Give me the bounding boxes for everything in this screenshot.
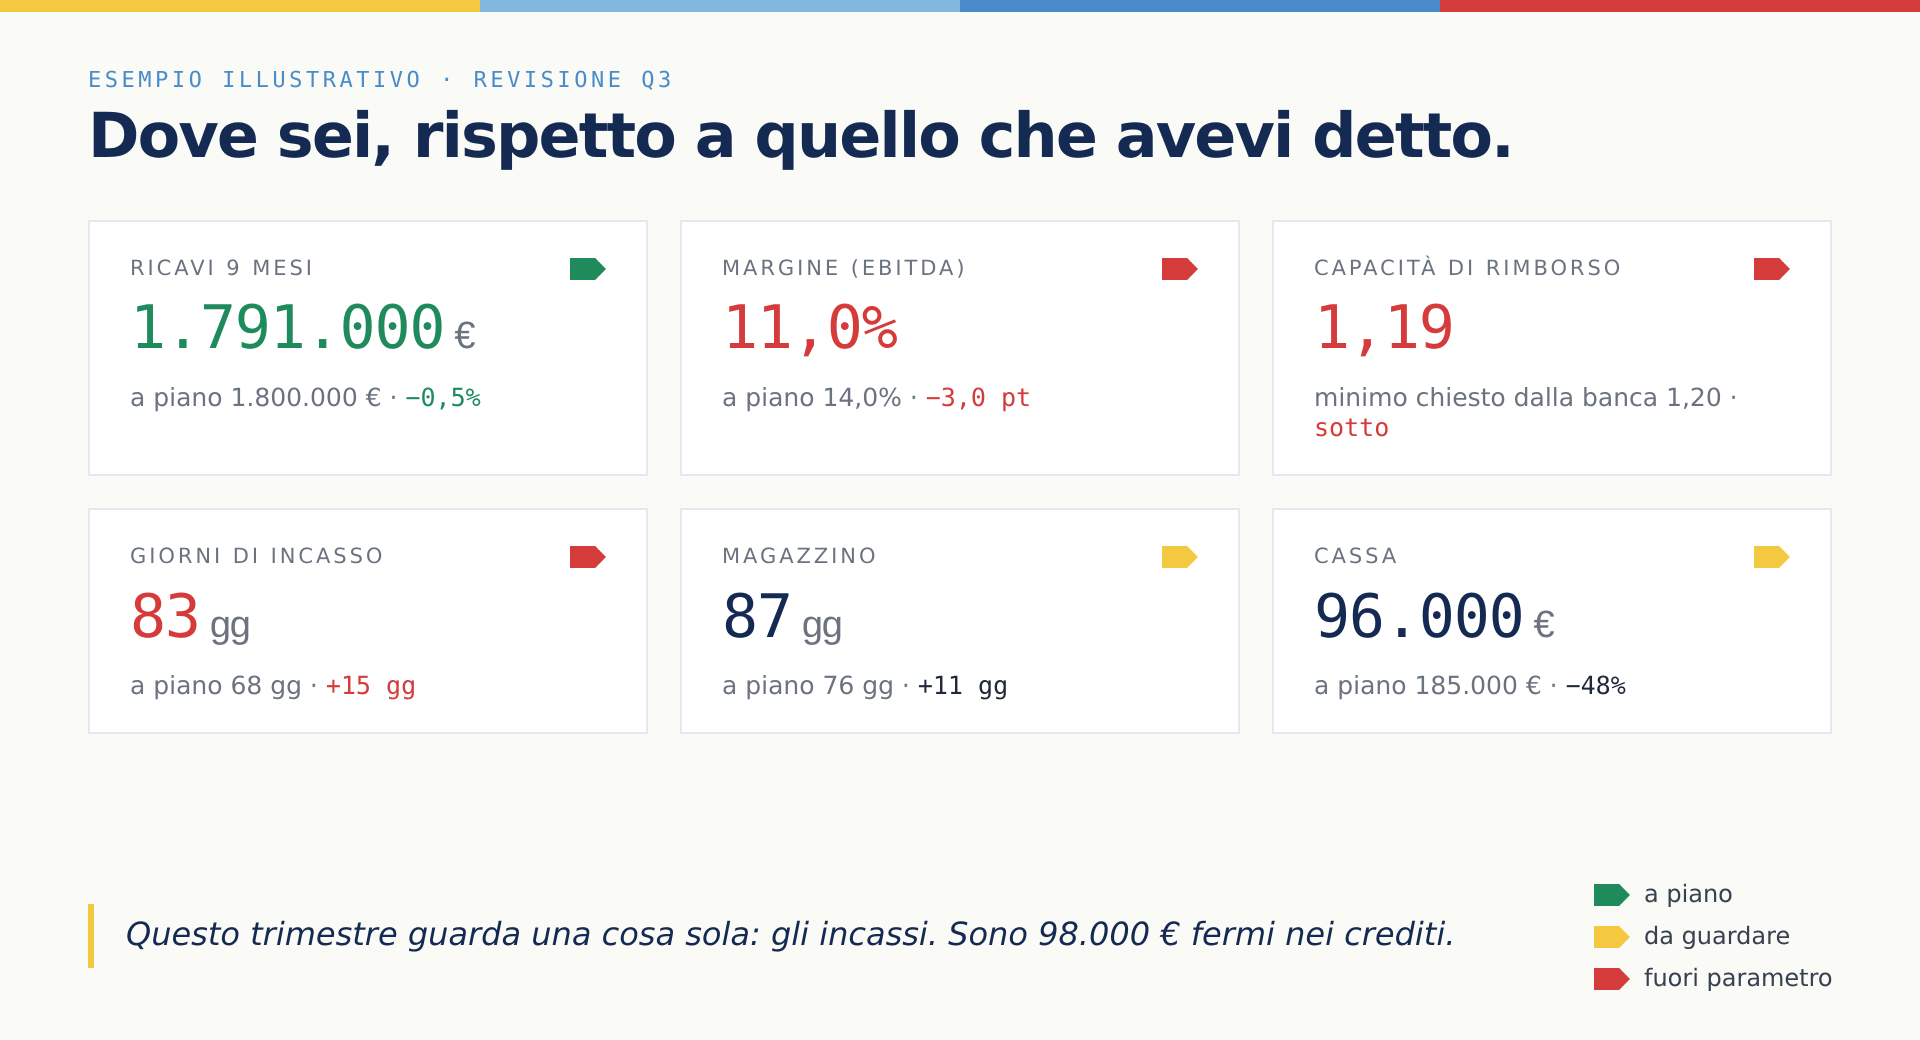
panel: giorni di incasso [88,508,648,734]
label: GIORNI DI INCASSO [130,544,385,568]
status tag: da guardare [1754,546,1790,568]
eyebrow: ESEMPIO ILLUSTRATIVO · REVISIONE Q3 [88,68,675,93]
label: MAGAZZINO [722,544,878,568]
legend text: fuori parametro: fuori parametro [1644,964,1833,992]
legend [1594,880,1833,992]
value: 1,19 [1314,293,1454,363]
label: RICAVI 9 MESI [130,256,315,280]
label: CAPACITÀ DI RIMBORSO [1314,256,1623,280]
panel: magazzino [680,508,1240,734]
status tag: fuori parametro [1162,258,1198,280]
status tag: da guardare [1162,546,1198,568]
value: 1.791.000 € [130,293,474,363]
status tag: fuori parametro [1754,258,1790,280]
comparison: a piano 76 gg · +11 gg [722,671,1008,700]
value: 87 gg [722,582,842,652]
legend text: a piano: a piano [1644,880,1733,908]
value: 96.000 € [1314,582,1553,652]
comparison: a piano 14,0% · −3,0 pt [722,383,1031,412]
value: 11,0% [722,293,897,363]
value: 83 gg [130,582,250,652]
label: MARGINE (EBITDA) [722,256,967,280]
legend tag: a piano [1594,884,1630,906]
panel: margine ebitda [680,220,1240,476]
comparison: a piano 68 gg · +15 gg [130,671,416,700]
legend tag: fuori parametro [1594,968,1630,990]
legend tag: da guardare [1594,926,1630,948]
panel: cassa [1272,508,1832,734]
legend text: da guardare: da guardare [1644,922,1790,950]
comparison: minimo chiesto dalla banca 1,20 · sotto [1314,383,1738,442]
callout bar [88,904,94,968]
status tag: fuori parametro [570,546,606,568]
panel: ricavi 9 mesi [88,220,648,476]
label: CASSA [1314,544,1399,568]
panel: capacita di rimborso [1272,220,1832,476]
comparison: a piano 1.800.000 € · −0,5% [130,383,481,412]
top colour bar [0,0,1920,12]
title: Dove sei, rispetto a quello che avevi detto. [88,99,1513,172]
status tag: a piano [570,258,606,280]
comparison: a piano 185.000 € · −48% [1314,671,1626,700]
callout text: Questo trimestre guarda una cosa sola: gli incassi. Sono 98.000 € fermi nei crediti. [126,915,1455,953]
